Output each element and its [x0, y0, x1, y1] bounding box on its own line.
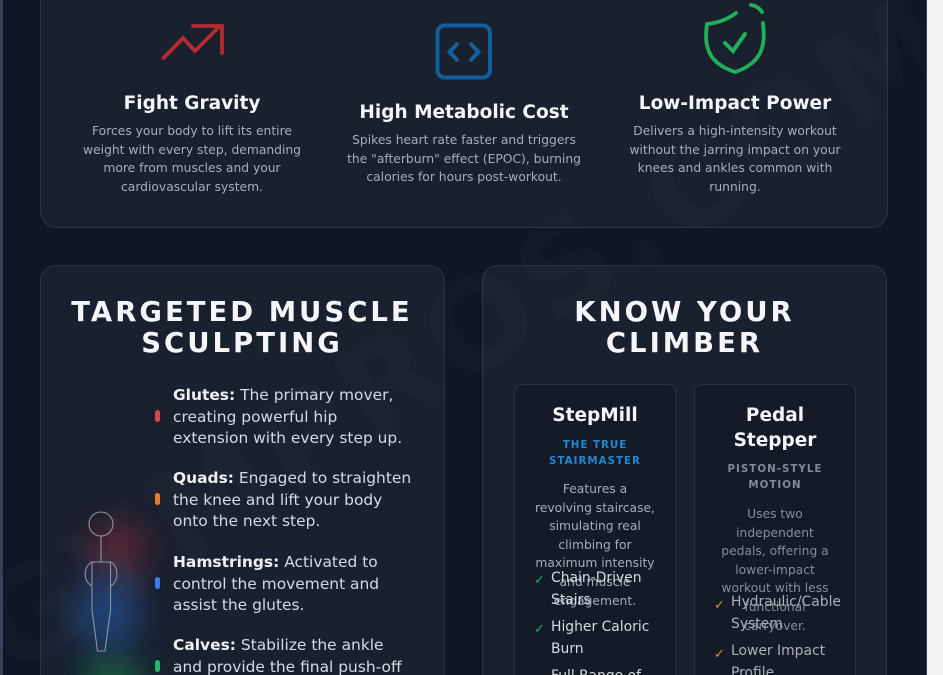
text: Pedal Stepper description: workout with less: [721, 581, 829, 595]
text: StepMill description: and muscle: [560, 575, 630, 589]
item: lower impact profile: Lower Impact: [731, 643, 825, 659]
check: ✓: [534, 622, 545, 637]
heading: targeted muscle sculpting: SCULPTING: [141, 327, 343, 359]
text: quads: the knee and lift your body: [173, 491, 382, 509]
item: hydraulic/cable system: [731, 594, 841, 632]
panel: benefits: [40, 0, 888, 228]
text: glutes: [173, 386, 402, 447]
subheading: the true stairmaster: [549, 439, 641, 466]
check: ✓: [714, 647, 725, 662]
text: Pedal Stepper description: functional: [744, 600, 806, 614]
heading: StepMill: StepMill: [552, 405, 638, 426]
text: calves: [173, 636, 402, 675]
subheading: piston-style motion: [728, 463, 822, 490]
text: glutes: extension with every step up.: [173, 429, 402, 447]
text: glutes: creating powerful hip: [173, 408, 337, 426]
text: hamstrings: [173, 553, 379, 614]
item: higher caloric burn: [551, 619, 649, 657]
text: hamstrings: control the movement and: [173, 575, 379, 593]
list: StepMill features: [534, 570, 649, 675]
subheading: piston-style motion: PISTON-STYLE: [728, 463, 822, 475]
text: glutes: Glutes: The primary mover,: [173, 386, 393, 404]
item: chain-driven stairs: Chain-Driven: [551, 570, 642, 586]
text: StepMill description: [535, 482, 655, 608]
text: calves: Calves: Stabilize the ankle: [173, 636, 384, 654]
text: Fight Gravity description: Forces your body to lift its entire: [92, 124, 292, 138]
item: lower impact profile: [731, 643, 825, 675]
text: Fight Gravity description: [83, 124, 301, 194]
text: Pedal Stepper description: Uses two: [747, 507, 803, 521]
text: Low-Impact Power description: knees and ankles common with: [638, 161, 832, 175]
text: quads: [173, 469, 411, 530]
icon: shield check: [704, 3, 766, 74]
heading: Low-Impact Power: Low-Impact Power: [639, 93, 831, 114]
text: quads: Quads: Engaged to straighten: [173, 469, 411, 487]
text: Low-Impact Power description: running.: [709, 180, 761, 194]
heading: targeted muscle sculpting: [71, 296, 413, 359]
card: Pedal Stepper: [694, 384, 856, 675]
heading: know your climber: KNOW YOUR: [574, 296, 795, 328]
item: higher caloric burn: Burn: [551, 641, 584, 657]
text: StepMill description: Features a: [563, 482, 627, 496]
text: Low-Impact Power description: without the jarring impact on your: [629, 143, 841, 157]
text: Fight Gravity description: weight with every step, demanding: [83, 143, 301, 157]
text: Pedal Stepper description: lower-impact: [735, 563, 815, 577]
text: Pedal Stepper description: carryover.: [744, 619, 806, 633]
text: Fight Gravity description: cardiovascular system.: [121, 180, 263, 194]
item: chain-driven stairs: [551, 570, 642, 608]
heading: Pedal Stepper: [734, 405, 816, 451]
text: High Metabolic Cost description: the "afterburn" effect (EPOC), burning: [347, 152, 581, 166]
text: hamstrings: assist the glutes.: [173, 596, 304, 614]
legend dot: glutes: [155, 410, 160, 422]
text: StepMill description: maximum intensity: [535, 556, 655, 570]
legend dot: calves: [155, 660, 160, 672]
item: higher caloric burn: Higher Caloric: [551, 619, 649, 635]
subheading: the true stairmaster: THE TRUE: [563, 439, 627, 451]
heading: High Metabolic Cost: High Metabolic Cost: [359, 102, 569, 123]
heading: know your climber: [574, 296, 795, 359]
heading: know your climber: CLIMBER: [606, 327, 763, 359]
panel: know your climber: [482, 265, 887, 675]
text: Pedal Stepper description: independent: [736, 526, 814, 540]
text: quads: onto the next step.: [173, 512, 320, 530]
icon: trending up arrow: [162, 24, 224, 60]
text: hamstrings: Hamstrings: Activated to: [173, 553, 378, 571]
panel: targeted muscle sculpting: [40, 265, 445, 675]
text: High Metabolic Cost description: [347, 133, 581, 184]
heading: targeted muscle sculpting: TARGETED MUSCLE: [71, 296, 413, 328]
text: Fight Gravity description: more from muscles and your: [103, 161, 281, 175]
legend dot: hamstrings: [155, 577, 160, 589]
text: Pedal Stepper description: pedals, offering a: [721, 544, 829, 558]
item: hydraulic/cable system: Hydraulic/Cable: [731, 594, 841, 610]
check: ✓: [534, 573, 545, 588]
subheading: the true stairmaster: STAIRMASTER: [549, 454, 641, 466]
heading: Fight Gravity: Fight Gravity: [124, 93, 260, 114]
check: ✓: [714, 598, 725, 613]
group: Pedal Stepper content: [714, 463, 841, 675]
subheading: piston-style motion: MOTION: [748, 478, 802, 490]
item: hydraulic/cable system: System: [731, 616, 783, 632]
text: StepMill description: simulating real: [549, 519, 641, 533]
text: High Metabolic Cost description: Spikes heart rate faster and triggers: [352, 133, 576, 147]
text: Low-Impact Power description: Delivers a high-intensity workout: [633, 124, 837, 138]
text: StepMill description: climbing for: [558, 538, 632, 552]
heading: Pedal Stepper: Stepper: [734, 430, 816, 451]
card: StepMill: [514, 384, 676, 675]
item: chain-driven stairs: Stairs: [551, 592, 591, 608]
icon: code box: [436, 24, 492, 80]
text: High Metabolic Cost description: calories for hours post-workout.: [366, 170, 562, 184]
text: Pedal Stepper description: [721, 507, 829, 633]
figure: body with muscle glow: [60, 510, 162, 675]
text: StepMill description: revolving staircase,: [535, 501, 655, 515]
heading: Pedal Stepper: Pedal: [746, 405, 804, 426]
text: Low-Impact Power description: [629, 124, 841, 194]
text: StepMill description: engagement.: [554, 594, 636, 608]
legend dot: quads: [155, 493, 160, 505]
